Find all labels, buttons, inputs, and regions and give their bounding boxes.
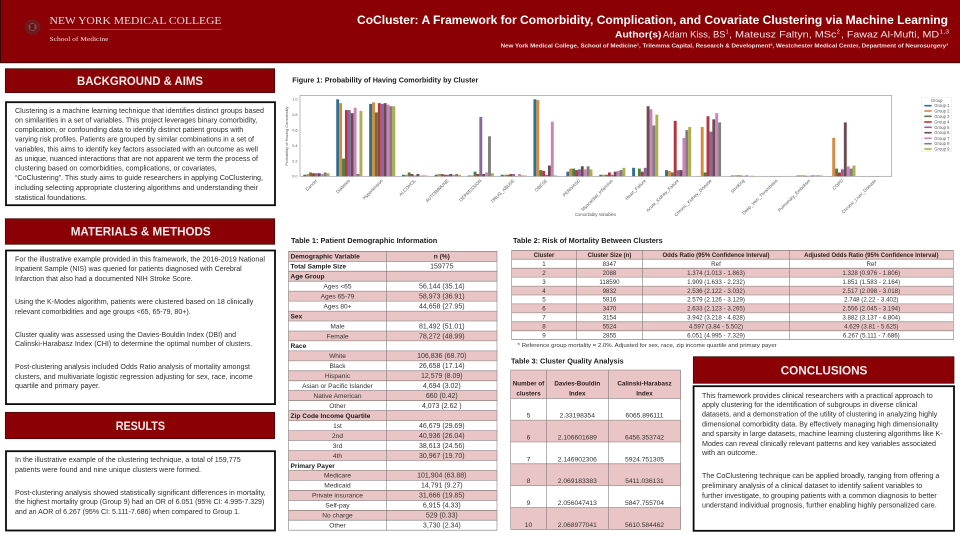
table 1 rows: 26,658 (17.14): [419, 363, 465, 370]
table 2 rows: Ref: [711, 261, 721, 268]
bars: Perivascular: [566, 166, 592, 176]
table 2 rows: 1.374 (1.013 - 1.863): [687, 270, 745, 277]
table 3 title: Table 3: Cluster Quality Analysis: [511, 356, 624, 366]
table 2 rows: 9: [542, 332, 546, 340]
table 2 rows: 3154: [603, 315, 617, 322]
x axis category labels: Chronic_Kidney_Disease: [673, 178, 713, 217]
authors: , Mateusz Faltyn, MSc: [729, 30, 837, 40]
table 2 rows: 2.536 (2.122 - 3.032): [687, 288, 745, 295]
table 2 rows: 8: [542, 324, 546, 330]
table 3 rows: 2.146902306: [558, 456, 597, 463]
authors: Author(s): [615, 30, 662, 40]
bars: Depression: [468, 117, 494, 176]
chart legend: Group 9: [934, 146, 950, 152]
table 1 row shading: [288, 251, 497, 520]
x axis category labels: Heart_Failure: [624, 178, 647, 201]
y axis ticks: 0.2: [292, 159, 298, 163]
affiliations: New York Medical College, School of Medicine¹, Trilemma Capital, Research & Development², Westchester Medical Center, Department of Neurosurgery³: [501, 44, 948, 50]
chart legend: Group 7: [934, 136, 950, 141]
text block: background: including selecting appropriate clustering algorithms and understanding their: [15, 183, 258, 192]
table 2: risk of mortality between clusters: [512, 236, 953, 349]
table 1 title: Table 1: Patient Demographic Information: [291, 236, 438, 245]
icon: college seal: [24, 19, 40, 35]
table 1 rows: Medicare: [324, 473, 351, 480]
table 1 rows: 78,272 (48.99): [419, 333, 465, 340]
text block: background: varying risk profiles. Patients are grouped by similar combinations in a set of: [15, 134, 255, 144]
authors: 1,3: [940, 30, 949, 36]
heading: background and aims: [5, 69, 275, 93]
table 1 rows: 44,658 (27.95): [419, 303, 465, 310]
text block: methods: [6, 250, 275, 404]
table 1 rows: Age Group: [290, 274, 325, 280]
table 2 footnote: * Reference group mortality = 2.0%. Adjusted for sex, race, zip income quartile and primary payer: [518, 343, 777, 349]
panel: results: [5, 412, 275, 530]
panel: conclusions: [693, 357, 954, 531]
table 3 rows: 5924.751305: [625, 456, 664, 463]
text block: methods: relevant comorbidities and age groups <65, 65-79, 80+).: [15, 307, 191, 316]
figure 1: bar chart of comorbidity probability: [284, 76, 952, 217]
panel: materials and methods: [5, 219, 275, 404]
bars: COPD: [829, 122, 855, 176]
table 2 rows: 2088: [603, 270, 617, 277]
x axis category labels: COPD: [831, 178, 845, 191]
chart legend: Group 4: [934, 120, 950, 124]
heading: background and aims: BACKGROUND & AIMS: [77, 74, 203, 88]
text block: methods: Using the K-Modes algorithm, patients were clustered based on 18 clinically: [15, 297, 253, 306]
text block: background: “CoClustering”. This study aims to guide researchers in applying CoClustering,: [15, 173, 263, 182]
text block: methods: Post-clustering analysis included Odds Ratio analysis of mortality amongst: [15, 362, 251, 371]
chart legend: Group 5: [934, 125, 950, 130]
text block: background: Clustering is a machine learning technique that identifies distinct groups based: [15, 106, 264, 115]
table 1 rows: 46,679 (29.69): [419, 423, 465, 430]
table 3 rows: 7: [527, 456, 531, 463]
table 1 rows: 529 (0.33): [426, 513, 458, 520]
table 2 rows: 3.942 (3.218 - 4.828): [687, 315, 745, 322]
x axis category labels: Hypertension: [362, 178, 384, 200]
table 3 rows: 5610.584462: [625, 522, 664, 529]
text block: methods: quartile and primary payer.: [15, 381, 100, 390]
bars: Chronic liver disease: [862, 175, 888, 177]
table 2 rows: 1.851 (1.583 - 2.164): [842, 279, 900, 286]
text block: results: [6, 451, 275, 530]
header banner: [0, 0, 960, 63]
authors: [615, 30, 949, 40]
text block: methods: For the illustrative example provided in this framework, the 2016-2019 National: [15, 254, 265, 264]
y axis ticks: [292, 98, 298, 179]
table 1 rows: Male: [330, 323, 345, 330]
x axis title: Comorbidity Variables: [575, 212, 617, 217]
heading: materials and methods: [5, 219, 275, 244]
table 2 rows: Adjusted Odds Ratio (95% Confidence Interval): [804, 253, 938, 259]
table 3 rows: 8: [527, 478, 531, 485]
x axis category labels: [304, 178, 877, 217]
table 1 rows: White: [329, 353, 346, 360]
bars: Acute kidney failure: [665, 121, 691, 176]
table 3 rows: 2.056047413: [558, 500, 597, 507]
text block: conclusions: datasets, and a demonstration of the utility of clustering in analyzing highly: [702, 410, 937, 418]
table 1 rows: 38,613 (24.56): [419, 443, 465, 450]
table 3 rows: Davies-Bouldin: [554, 381, 600, 388]
text block: conclusions: preliminary analysis of a clinical dataset to identify salient variables to: [702, 481, 922, 490]
text block: methods: Infarction that also had a documented NIH Stroke Score.: [15, 274, 193, 283]
x axis category labels: DRUG_ABUSE: [490, 178, 516, 204]
text block: methods: Inpatient Sample (NIS) was queried for patients diagnosed with Cerebral: [15, 264, 242, 273]
table 2 title: Table 2: Risk of Mortality Between Clusters: [513, 236, 663, 245]
college logo wordmark: NEW YORK MEDICAL COLLEGE: [50, 16, 222, 27]
bars: Deep vein thrombosis: [764, 175, 790, 177]
table 1 rows: Zip Code Income Quartile: [290, 413, 371, 420]
text block: conclusions: apply clustering for the identification of subgroups in diverse clinical: [702, 400, 918, 409]
bars: Obese: [533, 99, 560, 176]
table 2 rows: 6: [542, 306, 546, 313]
table 2 rows: 118590: [599, 279, 620, 286]
table 2 rows: 5816: [603, 297, 617, 304]
table 1 rows: Ages 80+: [323, 303, 352, 310]
chart legend: Group 8: [934, 141, 950, 146]
x axis category labels: Deep_Vein_Thrombosis: [741, 178, 779, 216]
table 2 rows: Odds Ratio (95% Confidence Interval): [662, 253, 770, 259]
table 2 rows: 5: [542, 297, 546, 304]
text block: conclusions: [694, 386, 954, 531]
text block: conclusions: Modes can reveal clinically relevant patterns and key variables associated: [702, 439, 936, 448]
table 1 rows: Primary Payer: [290, 463, 335, 470]
college logo wordmark: [50, 16, 222, 43]
table 2 rows: 4: [542, 288, 546, 295]
table 2 rows: 5524: [603, 324, 617, 330]
table 3 rows: Index: [636, 390, 653, 397]
table 3 rows: Calinski-Harabasz: [617, 381, 672, 388]
table 2 row shading: [512, 250, 953, 331]
x axis category labels: Myocardial_Infarction: [580, 178, 614, 212]
table 1 rows: [290, 254, 467, 530]
table 2 rows: 8347: [603, 261, 617, 268]
chart legend: Group 3: [934, 114, 950, 119]
table 2 rows: [534, 253, 938, 340]
table 3 rows: 2.069183383: [558, 478, 597, 485]
table 2 rows: Cluster Size (n): [588, 253, 631, 259]
text block: results: In the illustrative example of the clustering technique, a total of 159,775: [15, 455, 241, 464]
text block: conclusions: and sparsity in large datasets, machine learning clustering algorithms like K-: [702, 429, 943, 438]
heading: results: RESULTS: [116, 419, 165, 433]
poster title: CoCluster: A Framework for Comorbidity, Complication, and Covariate Clustering via Machine Learning: [357, 13, 948, 27]
table 1 rows: n (%): [434, 254, 450, 261]
text block: conclusions: further investigate, to grouping patients with a common diagnosis to better: [702, 491, 937, 500]
table 3 rows: 2.068977041: [558, 522, 597, 529]
table 3 rows: clusters: [516, 390, 541, 397]
table 1 rows: No charge: [322, 513, 353, 520]
text block: background: statistical foundations.: [15, 193, 87, 202]
table 2 rows: Cluster: [534, 253, 555, 259]
table 2 rows: 9832: [603, 288, 617, 295]
table 2 rows: 1: [542, 261, 546, 268]
bars: Smoking: [731, 174, 757, 177]
table 1 rows: 6,915 (4.33): [423, 503, 461, 510]
table 1 rows: Self-pay: [325, 503, 350, 510]
table 3 rows: 5847.755704: [625, 500, 664, 507]
bars: Diabetes: [336, 99, 362, 176]
text block: results: the highest mortality group (Group 9) had an OR of 6.051 (95% CI: 4.995-7.329): [15, 497, 265, 506]
chart title: Figure 1: Probability of Having Comorbidity by Cluster: [292, 76, 478, 85]
table 2 rows: 2.748 (2.22 - 3.402): [844, 297, 898, 304]
text block: background: as unique, nuanced interactions that are not apparent we term the process of: [15, 154, 259, 163]
table 3 row shading: [511, 370, 681, 529]
table 2 rows: 4.629 (3.81 - 5.625): [844, 324, 898, 330]
chart legend: Group 6: [934, 130, 950, 135]
x axis category labels: DEPRESSION: [458, 178, 483, 203]
x axis category labels: Chronic_Liver_Disease: [841, 178, 877, 215]
table 1 rows: 660 (0.42): [426, 393, 458, 400]
table 2 rows: 1.328 (0.976 - 1.806): [842, 270, 900, 277]
authors: , Fawaz Al-Mufti, MD: [841, 30, 939, 40]
table 1 rows: 56,144 (35.14): [419, 284, 465, 290]
table 1 rows: 31,666 (19.85): [419, 493, 465, 500]
bars: Myocardial infarction: [599, 168, 625, 176]
table 2 rows: 3.882 (3.137 - 4.804): [842, 315, 900, 322]
heading: materials and methods: MATERIALS & METHODS: [71, 224, 211, 238]
table 1 rows: 58,973 (36.91): [419, 293, 465, 300]
x axis category labels: ALCOHOL: [398, 178, 417, 197]
x axis category labels: Diabetes: [335, 178, 352, 194]
table 1 rows: Demographic Variable: [290, 254, 360, 261]
table 3 rows: [513, 381, 672, 529]
text block: conclusions: with an outcome.: [701, 448, 757, 457]
table 3 rows: 10: [525, 522, 532, 529]
authors: 1: [726, 30, 729, 36]
table 3 rows: 5411.036131: [625, 478, 664, 485]
authors: 2: [837, 30, 840, 36]
table 3 rows: 6: [527, 434, 531, 441]
table 1 rows: 12,579 (8.09): [421, 373, 463, 380]
table 1 rows: Black: [329, 363, 346, 370]
table 3 rows: 2.106601689: [558, 434, 597, 441]
table 1: patient demographics: [288, 236, 497, 530]
table 3 rows: Number of: [513, 381, 545, 388]
table 2 rows: 2: [542, 270, 546, 277]
table 1 rows: Asian or Pacific Islander: [302, 383, 374, 390]
panel: background and aims: [5, 69, 275, 205]
table 2 rows: 4.597 (3.84 - 5.502): [689, 324, 743, 330]
table 2 rows: 6.051 (4.995 - 7.329): [687, 332, 745, 340]
x axis category labels: Acute_Kidney_Failure: [645, 178, 680, 213]
heading: results: [5, 412, 275, 439]
table 1 rows: Medicaid: [324, 483, 351, 490]
table 3 rows: 6456.353742: [625, 434, 664, 441]
table 1 rows: 14,791 (9.27): [421, 483, 463, 490]
table 1 rows: Total Sample Size: [290, 264, 346, 271]
table 3 rows: 6065.896111: [625, 413, 664, 420]
bars: Autoimmune: [435, 174, 461, 176]
bars: Cancer: [303, 172, 329, 176]
chart legend: Group 2: [934, 108, 950, 114]
table 3: cluster quality analysis: [511, 356, 681, 529]
text block: background: [6, 102, 275, 205]
y axis ticks: 1.0: [292, 98, 298, 102]
table 3 rows: 2.33198354: [560, 413, 595, 420]
x axis category labels: Pulmonary_Embolism: [777, 178, 812, 213]
authors: Adam Kiss, BS: [663, 30, 726, 40]
x axis category labels: Cancer: [304, 178, 319, 192]
text block: results: patients were found and nine unique clusters were formed.: [15, 465, 201, 474]
table 1 rows: 106,836 (68.70): [417, 353, 467, 360]
table 1 rows: Ages <65: [323, 284, 352, 290]
y axis ticks: 0.4: [292, 144, 298, 148]
chart legend: Group 1: [934, 103, 950, 108]
plot frame: [300, 96, 892, 176]
table 1 rows: Ages 65-79: [321, 293, 355, 300]
y axis title: Probability of Having Comorbidity: [284, 106, 289, 166]
table 1 rows: 4,073 (2.62 ): [422, 403, 462, 410]
table 2 rows: 3470: [603, 306, 617, 313]
college logo wordmark: School of Medicine: [50, 36, 109, 43]
table 3 rows: Index: [569, 390, 586, 397]
x axis category labels: PERIVASC: [562, 178, 582, 198]
bars: Drug abuse: [501, 174, 527, 176]
text block: background: clustering based on comorbidities, complications, or covariates,: [15, 164, 217, 172]
chart legend: [922, 97, 952, 152]
x axis category labels: Smoking: [730, 178, 746, 194]
text block: methods: Cluster quality was assessed using the Davies-Bouldin Index (DBI) and: [15, 330, 236, 339]
table 1 rows: Native American: [313, 393, 362, 400]
y axis ticks: 0.0: [292, 175, 298, 179]
table 2 rows: 6.267 (5.111 - 7.686): [843, 332, 900, 340]
table 2 rows: 2.633 (2.123 - 3.265): [687, 306, 745, 313]
table 2 rows: 2.579 (2.126 - 3.129): [687, 297, 745, 304]
text block: background: on similarities in a set of variables. This project leverages binary comorbidity,: [15, 116, 257, 124]
text block: conclusions: understand individual prognosis, further enabling highly personalized care.: [702, 500, 937, 510]
table 2 rows: 1.909 (1.633 - 2.232): [687, 279, 745, 286]
text block: results: and an AOR of 6.267 (95% CI: 5.111-7.686) when compared to Group 1.: [15, 507, 240, 516]
x axis category labels: AUTOIMMUNE: [424, 178, 450, 203]
table 3 rows: 5: [527, 413, 531, 420]
table 2 rows: Ref: [866, 261, 876, 268]
text block: background: variables, this aims to identify key factors associated with an outcome as well: [15, 144, 258, 154]
text block: conclusions: dimensional comorbidity data. By effectively managing high dimensionality: [702, 420, 938, 428]
text block: methods: clusters, and multivariate logistic regression adjusting for sex, race, income: [15, 372, 253, 381]
table 1 rows: 1st: [333, 423, 342, 430]
text block: background: complication, or confounding data to identify distinct patient groups with: [15, 125, 243, 134]
bars: Heart failure: [632, 106, 658, 176]
table 1 rows: Other: [329, 522, 347, 530]
text block: conclusions: The CoClustering technique can be applied broadly, ranging from offering a: [702, 471, 940, 480]
bars: Hypertension: [369, 102, 395, 176]
table 1 rows: 3,730 (2.34): [423, 522, 461, 530]
table 1 rows: 2nd: [332, 433, 343, 440]
text block: methods: Calinski-Harabasz Index (CHI) to determine the optimal number of clusters.: [15, 339, 252, 348]
table 2 rows: 2.556 (2.045 - 3.194): [842, 306, 900, 313]
heading: conclusions: [693, 357, 954, 383]
table 1 rows: Private insurance: [312, 493, 363, 500]
x axis category labels: OBESE: [534, 178, 548, 193]
table 2 rows: 2855: [603, 332, 617, 340]
table 3 rows: 9: [527, 500, 531, 507]
table 1 rows: 40,936 (26.04): [419, 433, 465, 440]
bars: Pulmonary embolism: [797, 174, 823, 177]
table 1 rows: Other: [329, 403, 347, 410]
table 2 rows: 3: [542, 279, 546, 286]
table 1 rows: 30,967 (19.70): [419, 453, 465, 460]
bars: Alcohol: [402, 172, 428, 176]
table 1 rows: Sex: [290, 313, 303, 320]
table 1 rows: 101,904 (63.88): [417, 473, 467, 480]
bars: Chronic kidney disease: [698, 113, 724, 176]
table 2 rows: 7: [542, 315, 546, 322]
text block: conclusions: This framework provides clinical researchers with a practical approach to: [702, 391, 933, 400]
chart legend: Group: [931, 98, 943, 103]
y axis ticks: 0.8: [292, 113, 298, 117]
table 1 rows: 4th: [333, 453, 342, 460]
text block: results: Post-clustering analysis showed statistically significant differences in mortality,: [15, 488, 266, 497]
table 1 rows: Race: [290, 343, 307, 350]
heading: conclusions: CONCLUSIONS: [781, 364, 867, 378]
table 1 rows: 4,694 (3.02): [423, 383, 461, 390]
y axis ticks: 0.6: [292, 128, 298, 132]
table 1 rows: Female: [326, 333, 349, 340]
table 1 rows: 81,492 (51.01): [419, 323, 465, 330]
table 2 rows: 2.517 (2.098 - 3.018): [842, 288, 900, 295]
table 1 rows: 3rd: [333, 443, 343, 450]
table 1 rows: 159775: [430, 264, 454, 271]
table 1 rows: Hispanic: [325, 373, 351, 380]
